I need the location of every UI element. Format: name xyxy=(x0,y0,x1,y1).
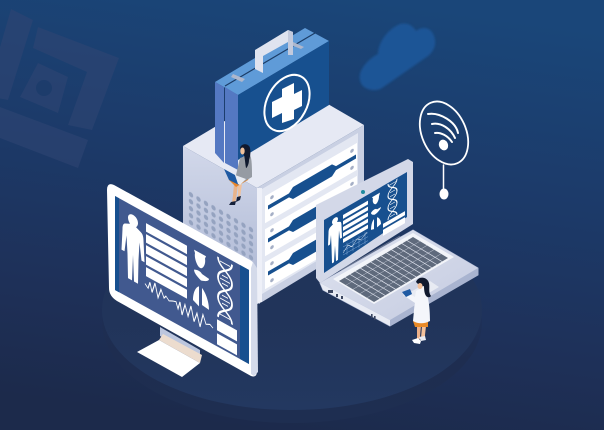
monitor DNA xyxy=(218,257,232,325)
case handle grip xyxy=(255,30,293,73)
laptop lower bars xyxy=(383,211,405,236)
server top face xyxy=(183,82,364,188)
monitor text bars xyxy=(146,223,187,299)
icon: wifi pin xyxy=(410,94,478,200)
keyboard xyxy=(339,237,448,302)
medical case xyxy=(215,28,329,170)
case handle brackets xyxy=(231,42,304,82)
monitor stand xyxy=(137,327,202,377)
trackpad xyxy=(407,281,439,300)
organ: heart xyxy=(194,250,206,271)
case side panels xyxy=(215,82,224,163)
laptop lid xyxy=(316,159,413,283)
case front face xyxy=(238,41,329,160)
laptop base xyxy=(320,230,478,326)
icon: cloud xyxy=(360,23,435,90)
laptop chart xyxy=(343,231,368,257)
monitor lower bars xyxy=(217,319,237,355)
doctor with tablet xyxy=(402,278,431,344)
server drive rows xyxy=(265,143,357,289)
icon: medical cross xyxy=(255,67,319,139)
case top face xyxy=(215,28,329,95)
monitor heartbeat line xyxy=(145,278,213,334)
woman sitting with laptop xyxy=(224,144,252,205)
monitor frame xyxy=(107,184,257,376)
monitor xyxy=(107,184,258,377)
laptop xyxy=(316,159,478,326)
platform xyxy=(102,210,482,423)
laptop ports xyxy=(328,290,376,320)
laptop DNA xyxy=(388,179,397,220)
logo watermark xyxy=(0,9,119,168)
laptop organs xyxy=(371,192,381,231)
server right face xyxy=(257,125,364,302)
laptop webcam xyxy=(361,190,365,194)
organ: liver xyxy=(194,268,209,285)
monitor organs xyxy=(193,249,209,312)
laptop screen xyxy=(324,172,407,273)
server left face xyxy=(183,146,260,304)
server vent dots xyxy=(188,190,255,264)
monitor screen xyxy=(115,196,249,364)
laptop text bars xyxy=(343,201,368,243)
monitor body figure xyxy=(122,209,144,287)
server tower xyxy=(183,82,364,304)
laptop deck light xyxy=(333,233,454,304)
laptop speaker slot xyxy=(341,236,400,270)
organ: lungs xyxy=(193,283,209,312)
laptop body figure xyxy=(328,214,342,266)
